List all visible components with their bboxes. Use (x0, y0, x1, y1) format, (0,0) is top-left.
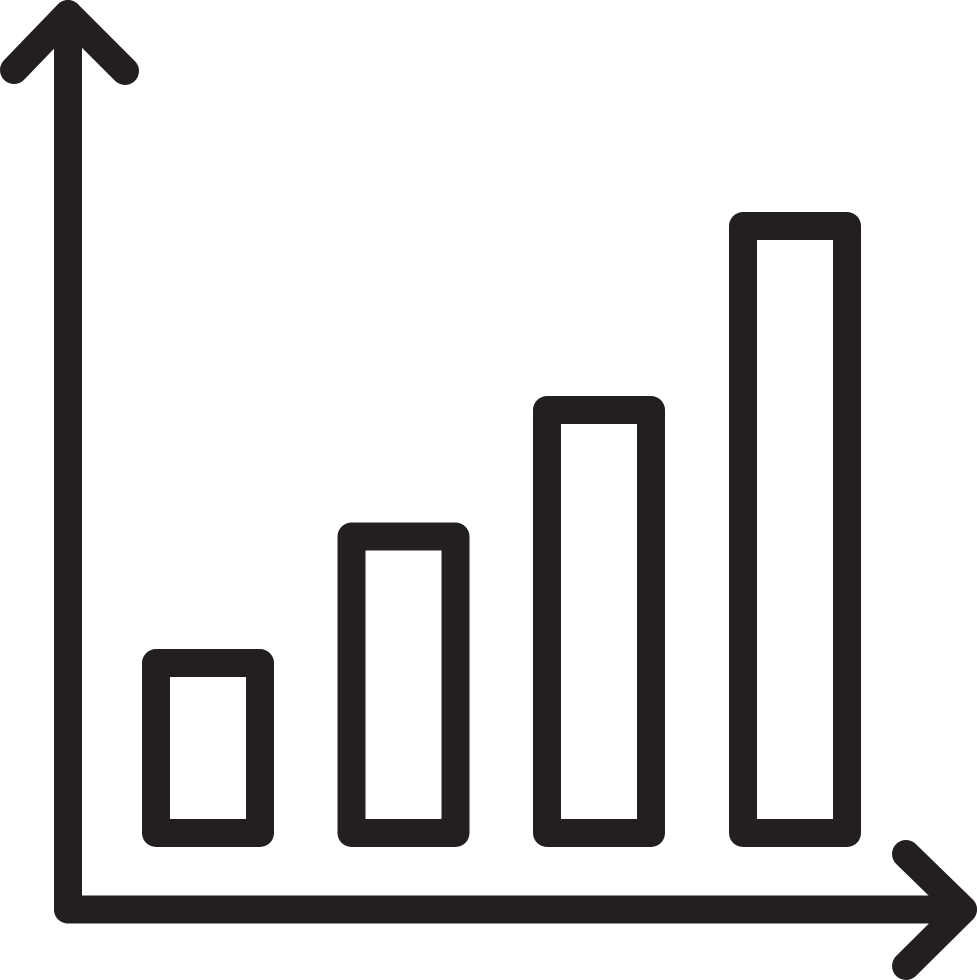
horizontal axis arrow (68, 854, 963, 966)
bars (156, 226, 847, 833)
bar 3 (547, 410, 651, 833)
vertical axis arrow (14, 14, 125, 910)
bar 4 (743, 226, 847, 833)
bar 1 (156, 663, 260, 833)
bar 2 (352, 536, 456, 833)
